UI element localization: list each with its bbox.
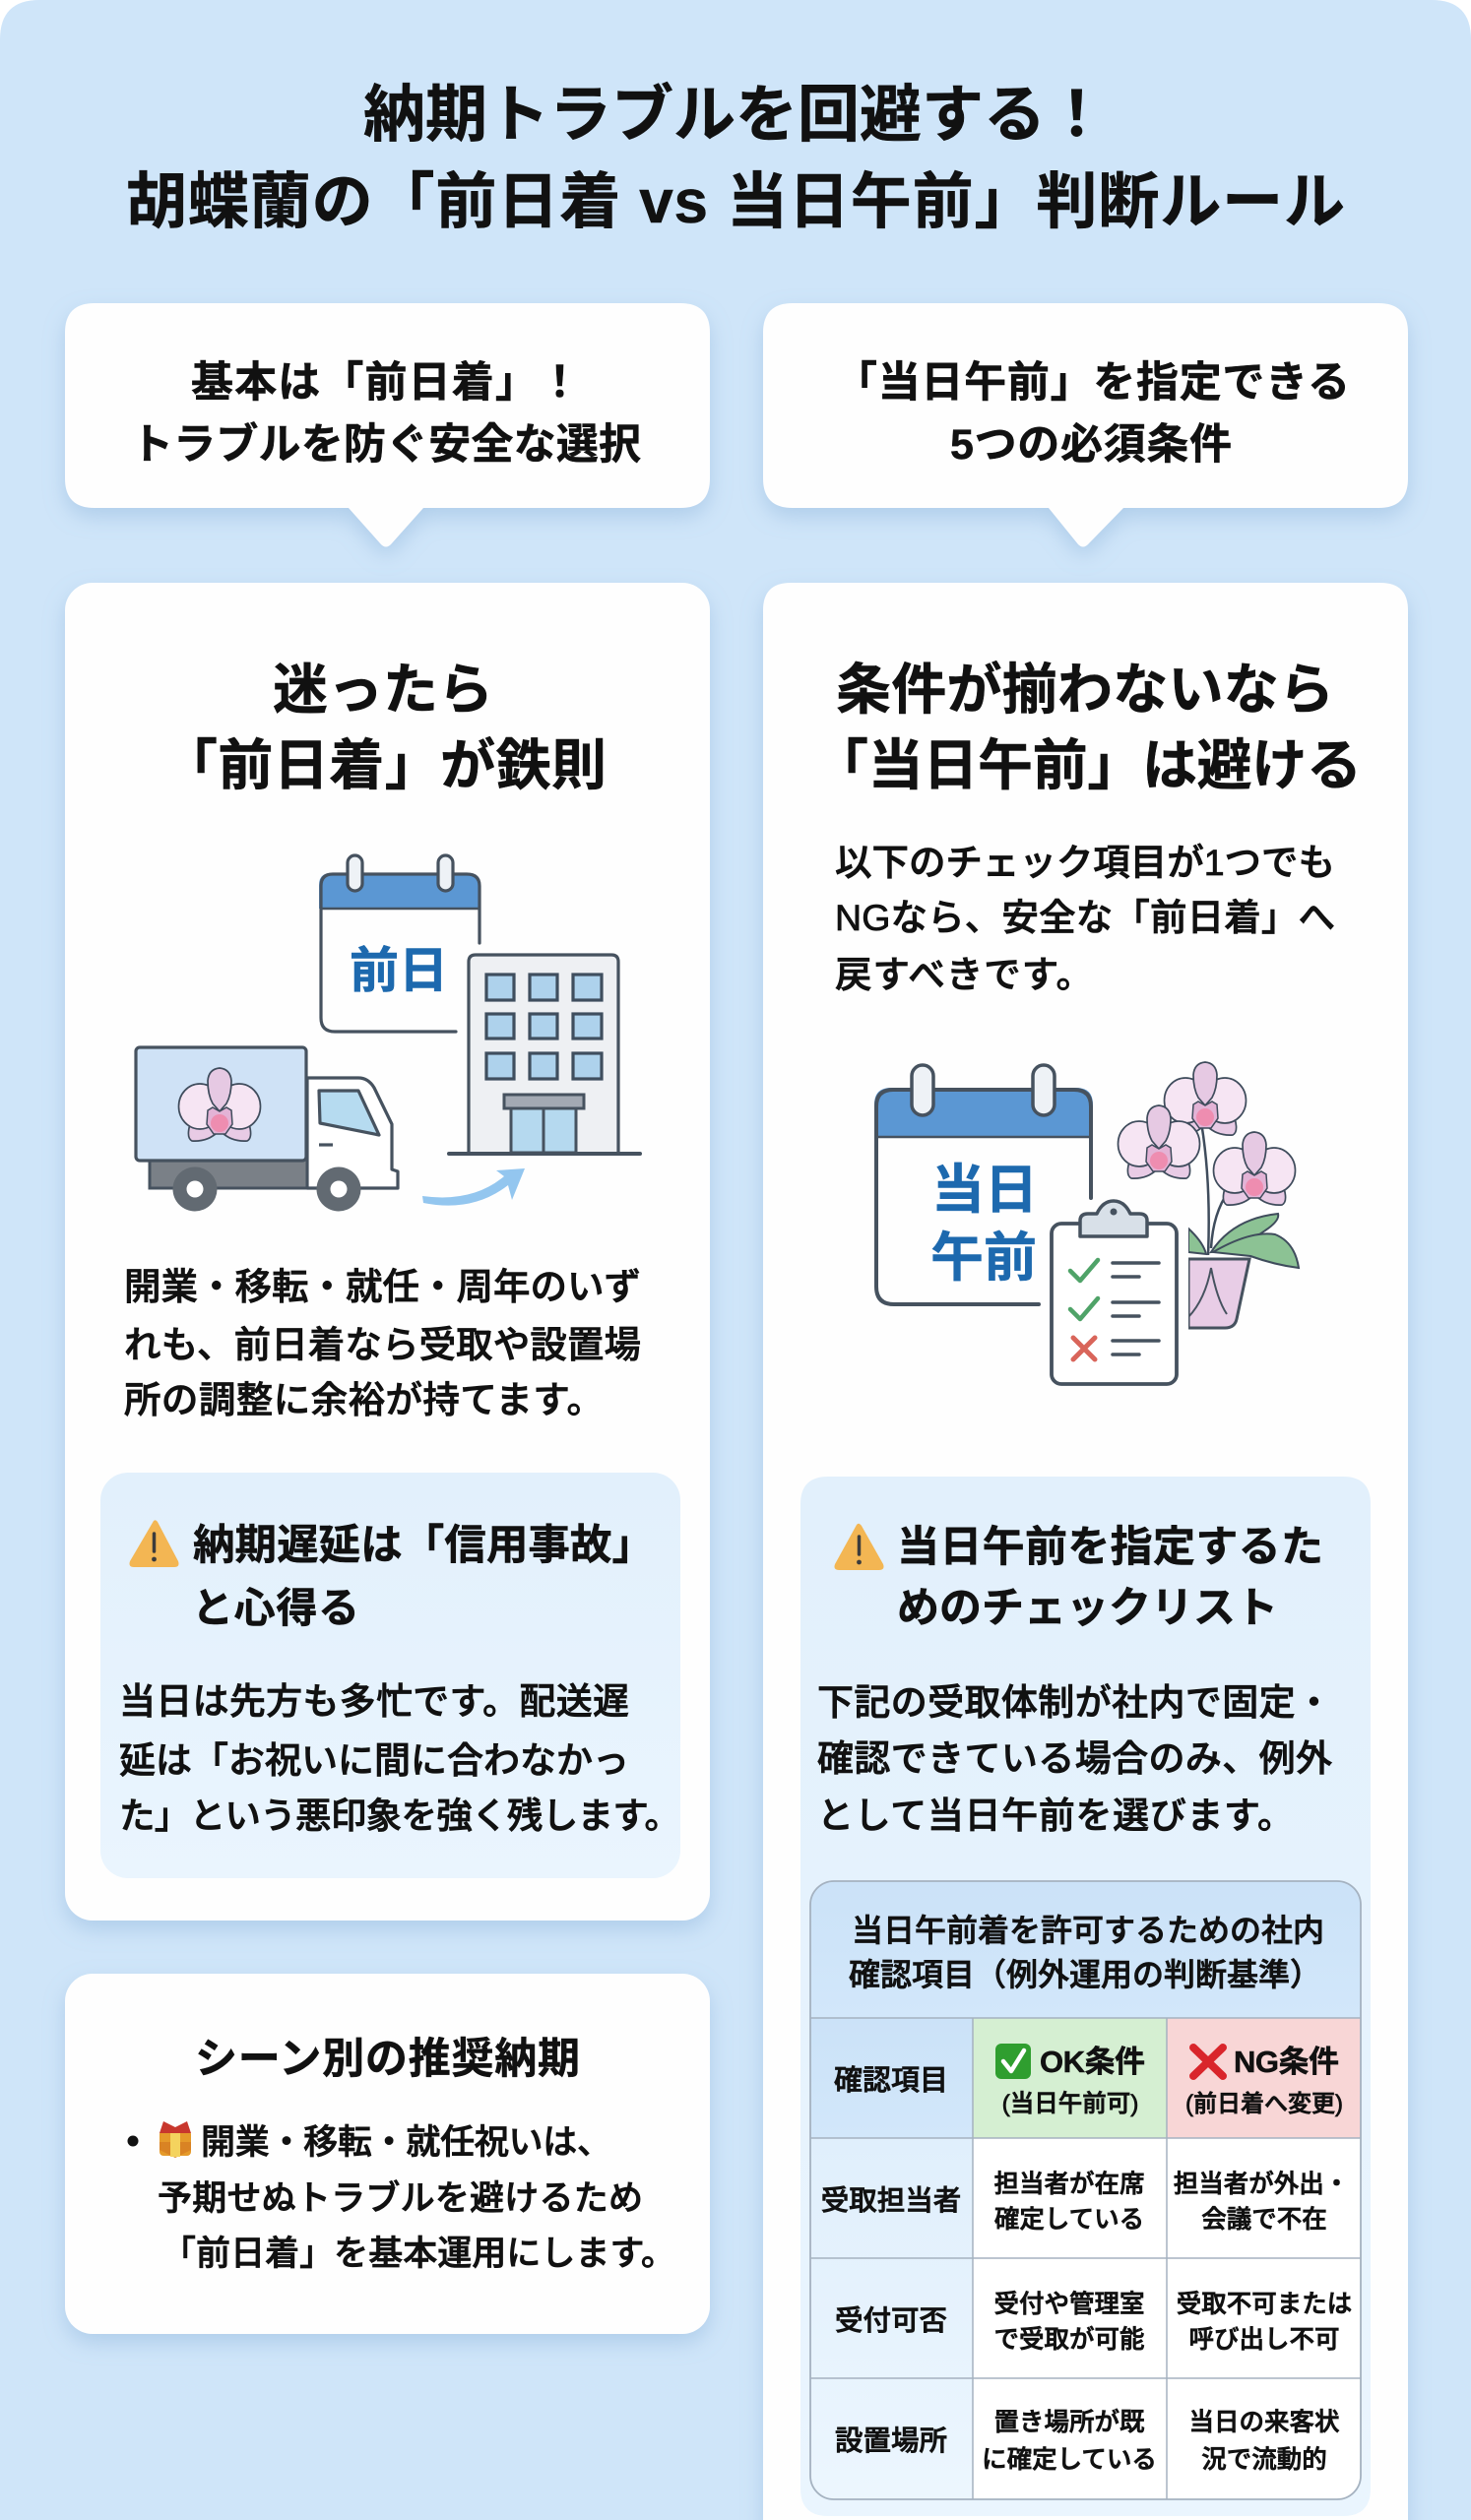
icon: warning triangle	[835, 1524, 884, 1570]
row: placement: 置き場所が既	[993, 2409, 1145, 2436]
table title: 当日午前着を許可するための社内	[852, 1913, 1324, 1948]
left card body text: れも、前日着なら受取や設置場	[124, 1324, 641, 1365]
row: placement: 況で流動的	[1201, 2446, 1327, 2474]
table header: 確認項目	[834, 2064, 948, 2097]
row: reception: で受取が可能	[993, 2326, 1145, 2354]
arrow: delivery direction	[422, 1168, 525, 1206]
icon: calendar	[874, 1065, 1093, 1304]
right card heading: 条件が揃わないなら	[836, 659, 1334, 721]
illustration: calendar, clipboard and orchid	[874, 1062, 1299, 1384]
callout: delivery delay warning: た」という悪印象を強く残します。	[119, 1796, 680, 1836]
row: receiver	[821, 2171, 1349, 2234]
row: receiver: 担当者が外出・	[1174, 2171, 1349, 2198]
callout: delivery delay warning: 納期遅延は「信用事故」	[193, 1523, 654, 1569]
table header: (前日着へ変更)	[1185, 2091, 1343, 2117]
panel: left main card	[65, 583, 710, 1921]
callout: checklist box: 確認できている場合のみ、例外	[817, 1738, 1332, 1779]
left card heading: 「前日着」が鉄則	[162, 734, 607, 796]
callout: delivery delay warning: 当日は先方も多忙です。配送遅	[119, 1681, 629, 1722]
row: reception: 受付可否	[835, 2305, 947, 2337]
icon: gift	[160, 2121, 191, 2158]
row: placement: に確定している	[982, 2446, 1157, 2474]
table header: (当日午前可)	[1002, 2090, 1138, 2117]
panel: scene recommendations: 「前日着」を基本運用にします。	[161, 2235, 675, 2273]
left card body text	[124, 1266, 641, 1420]
speech bubble: basic rule: 基本は「前日着」！	[191, 359, 581, 407]
title: 胡蝶蘭の「前日着 vs 当日午前」判断ルール	[126, 168, 1345, 236]
row: reception: 受付や管理室	[993, 2291, 1145, 2318]
left card heading: 迷ったら	[273, 659, 493, 721]
row: receiver: 確定している	[994, 2206, 1144, 2234]
speech bubble: basic rule	[65, 303, 710, 547]
icon: red cross	[1193, 2048, 1223, 2076]
left card body text: 開業・移転・就任・周年のいず	[124, 1266, 641, 1307]
row: receiver: 会議で不在	[1201, 2206, 1327, 2234]
row: placement: 当日の来客状	[1188, 2409, 1340, 2436]
callout: checklist box: として当日午前を選びます。	[817, 1796, 1294, 1836]
right card body text: NGなら、安全な「前日着」へ	[835, 897, 1335, 938]
icon: warning triangle	[130, 1520, 179, 1567]
callout: checklist box: めのチェックリスト	[897, 1585, 1278, 1632]
table header	[834, 2044, 1343, 2117]
speech bubble: required conditions: 「当日午前」を指定できる	[835, 359, 1350, 407]
panel: scene recommendations: シーン別の推奨納期	[195, 2036, 580, 2083]
title	[126, 81, 1345, 236]
callout: checklist box: 下記の受取体制が社内で固定・	[817, 1682, 1332, 1723]
callout: delivery delay warning: 延は「お祝いに間に合わなかっ	[119, 1740, 629, 1781]
icon: calendar: 当日	[931, 1161, 1038, 1220]
callout: delivery delay warning: と心得る	[192, 1585, 359, 1631]
callout: checklist box	[800, 1477, 1371, 2516]
left card heading	[162, 659, 607, 796]
icon: green check	[995, 2044, 1031, 2079]
row: receiver: 受取担当者	[821, 2185, 961, 2217]
row: reception: 呼び出し不可	[1188, 2326, 1340, 2354]
table title	[849, 1913, 1324, 1992]
icon: calendar	[319, 855, 480, 1032]
speech bubble: basic rule: トラブルを防ぐ安全な選択	[131, 421, 641, 469]
speech bubble: required conditions: 5つの必須条件	[950, 421, 1232, 469]
right card body text	[835, 842, 1335, 995]
panel: scene recommendations	[65, 1974, 710, 2334]
row: placement: 設置場所	[835, 2426, 947, 2457]
icon: orchid plant	[1119, 1062, 1299, 1331]
table: internal confirmation items	[810, 1881, 1361, 2499]
icon: office building	[449, 955, 640, 1154]
icon: calendar: 前日	[350, 943, 448, 998]
icon: calendar: 午前	[930, 1228, 1037, 1288]
panel: scene recommendations: 開業・移転・就任祝いは、	[201, 2123, 611, 2162]
table title: 確認項目（例外運用の判断基準）	[849, 1957, 1321, 1992]
row: placement	[835, 2409, 1340, 2474]
table header: OK条件	[1040, 2045, 1145, 2079]
icon: clipboard checklist	[1052, 1201, 1177, 1384]
panel: right main card	[763, 583, 1408, 2520]
right card body text: 以下のチェック項目が1つでも	[835, 842, 1335, 883]
row: receiver: 担当者が在席	[993, 2171, 1145, 2198]
callout: delivery delay warning	[100, 1473, 680, 1878]
icon: delivery truck	[136, 1047, 398, 1211]
panel: scene recommendations: 予期せぬトラブルを避けるため	[158, 2179, 643, 2218]
title: 納期トラブルを回避する！	[363, 81, 1108, 150]
table header: NG条件	[1234, 2045, 1339, 2079]
bullet	[128, 2136, 138, 2146]
speech bubble: required conditions	[763, 303, 1408, 547]
left card body text: 所の調整に余裕が持てます。	[124, 1379, 604, 1420]
right card heading	[813, 659, 1362, 796]
row: reception: 受取不可または	[1177, 2291, 1352, 2318]
callout: checklist box: 当日午前を指定するた	[897, 1524, 1323, 1571]
right card body text: 戻すべきです。	[835, 954, 1093, 995]
illustration: truck, calendar and building	[136, 855, 640, 1211]
row: reception	[835, 2291, 1352, 2354]
right card heading: 「当日午前」は避ける	[813, 734, 1362, 796]
